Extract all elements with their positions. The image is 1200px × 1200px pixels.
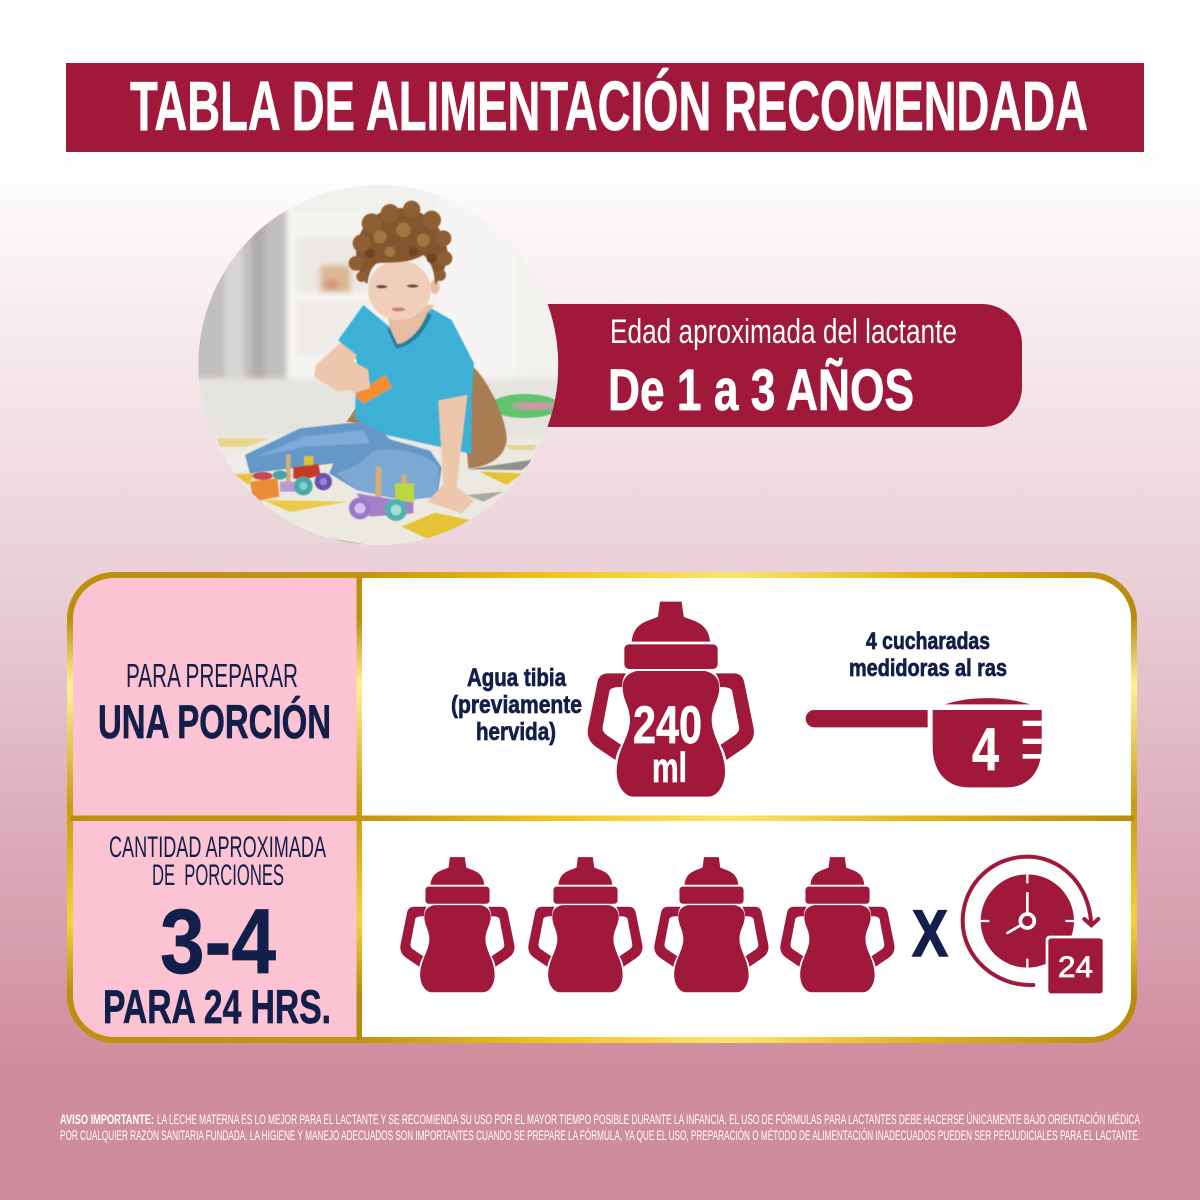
row label: porciones: 3-4	[160, 891, 276, 993]
icon: sippy cup 3	[654, 857, 769, 992]
scoop label: medidoras al ras	[849, 655, 1007, 682]
icon: 240 ml sippy cup: ml	[652, 744, 687, 791]
row label: porciones: CANTIDAD APROXIMADA	[109, 831, 326, 864]
sock	[228, 452, 252, 475]
age pill	[500, 304, 1022, 427]
age caption: Edad aproximada del lactante	[610, 313, 957, 351]
wooden toys	[250, 454, 414, 521]
icon: 24 hour clock	[963, 857, 1105, 996]
row label: una porción: UNA PORCIÓN	[98, 695, 331, 748]
icon: measuring scoop	[806, 698, 1042, 787]
face	[368, 260, 431, 320]
icon: sippy cup 1	[400, 857, 515, 992]
icon: 240 ml sippy cup: 240	[633, 696, 702, 755]
row label: una porción	[98, 657, 331, 748]
icon: 240 ml sippy cup	[588, 602, 754, 797]
icon: sippy cup 2	[528, 857, 643, 992]
scoop label: 4 cucharadas	[866, 628, 990, 655]
multiplication sign: X	[912, 896, 948, 970]
child photo illustration	[190, 180, 570, 550]
neck	[387, 305, 435, 344]
legal notice	[60, 1112, 1140, 1143]
row label: porciones	[103, 831, 331, 1033]
row label: porciones: PARA 24 HRS.	[103, 980, 331, 1033]
near arm and hand	[427, 395, 474, 513]
row label: porciones: DE PORCIONES	[152, 859, 284, 892]
toy block in hand	[355, 375, 392, 404]
age value: De 1 a 3 AÑOS	[608, 358, 914, 423]
teddy bear	[463, 367, 507, 468]
row label: una porción: PARA PREPARAR	[126, 657, 298, 694]
water label: hervida)	[476, 718, 556, 746]
icon: 24 hour clock: 24	[1058, 951, 1093, 984]
water label	[451, 664, 582, 746]
icon: measuring scoop: 4	[972, 716, 1000, 783]
scoop label	[849, 628, 1007, 682]
legal notice: AVISO IMPORTANTE:	[60, 1112, 154, 1127]
water label: Agua tibia	[467, 664, 567, 692]
water label: (previamente	[451, 691, 582, 719]
icon: sippy cup 4	[780, 857, 895, 992]
hair	[356, 208, 447, 285]
jeans	[245, 421, 442, 501]
far arm and hand	[314, 343, 368, 392]
feeding table panel	[67, 575, 1137, 1040]
shirt	[338, 305, 474, 454]
